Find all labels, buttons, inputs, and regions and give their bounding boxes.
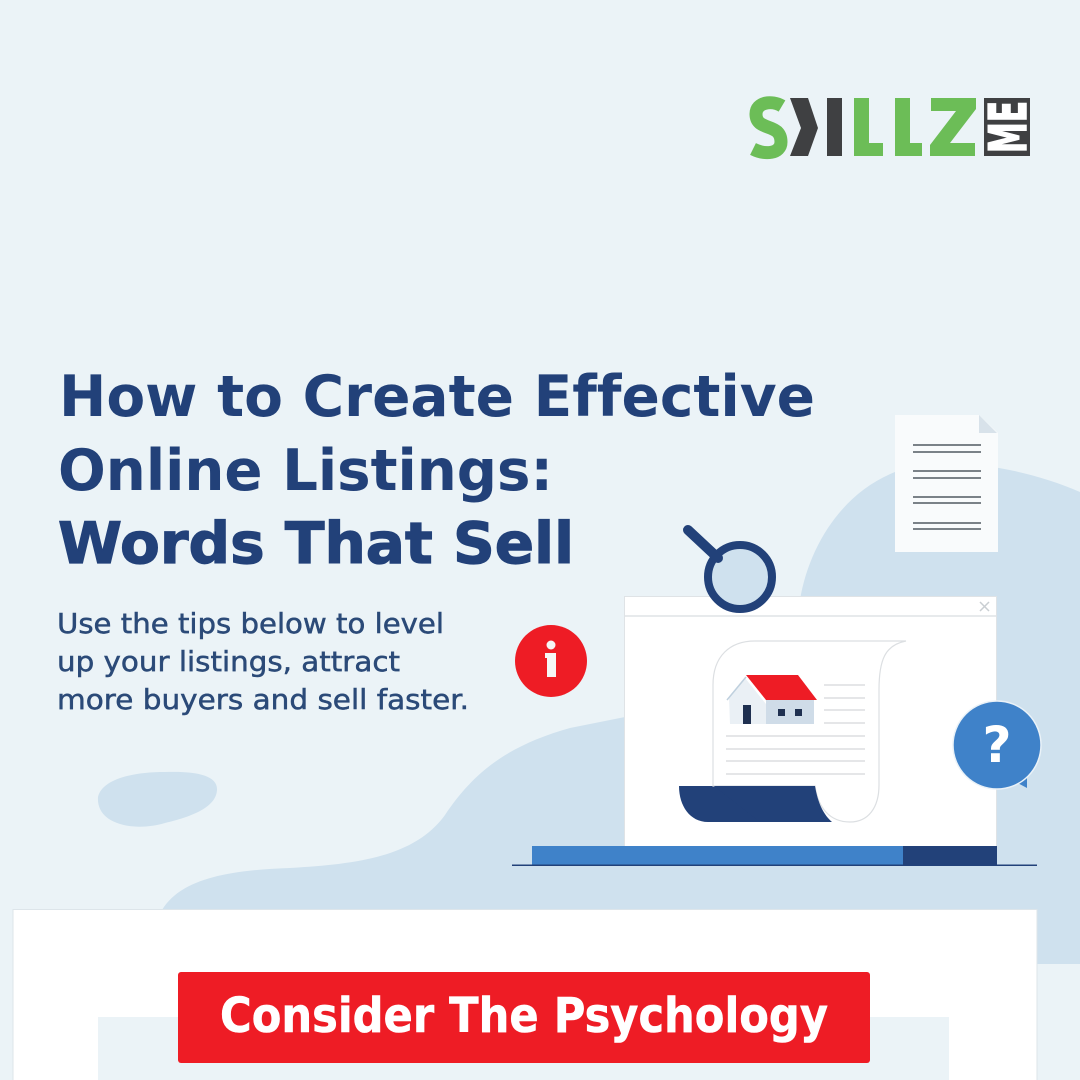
subtitle: more buyers and sell faster. [57, 683, 469, 716]
heading: Consider The Psychology [178, 972, 870, 1063]
heading: Consider The Psychology: Consider The Psychology [220, 988, 828, 1044]
desk bar [512, 846, 1037, 866]
icon: info badge [515, 625, 587, 697]
icon: document [895, 415, 998, 552]
panel: white card [13, 910, 1037, 1080]
icon: question bubble: ? [982, 716, 1012, 774]
title: How to Create Effective [59, 364, 815, 430]
title [58, 364, 815, 577]
subtitle [57, 607, 469, 716]
title: Words That Sell [58, 511, 574, 577]
background blob [162, 464, 1080, 964]
icon: question bubble [953, 701, 1041, 789]
text lines [726, 685, 865, 774]
subtitle: up your listings, attract [57, 645, 400, 678]
inner panel [98, 1017, 949, 1080]
window [624, 596, 997, 846]
logo: SkillzMe: ME [979, 101, 1039, 153]
scroll with house [679, 641, 906, 822]
logo: SkillzMe [753, 98, 1039, 156]
title: Online Listings: [58, 438, 553, 504]
subtitle: Use the tips below to level [57, 607, 444, 640]
icon: house [727, 675, 817, 724]
icon: close [980, 602, 989, 611]
small blob [98, 772, 217, 827]
icon: magnifier [688, 530, 772, 609]
